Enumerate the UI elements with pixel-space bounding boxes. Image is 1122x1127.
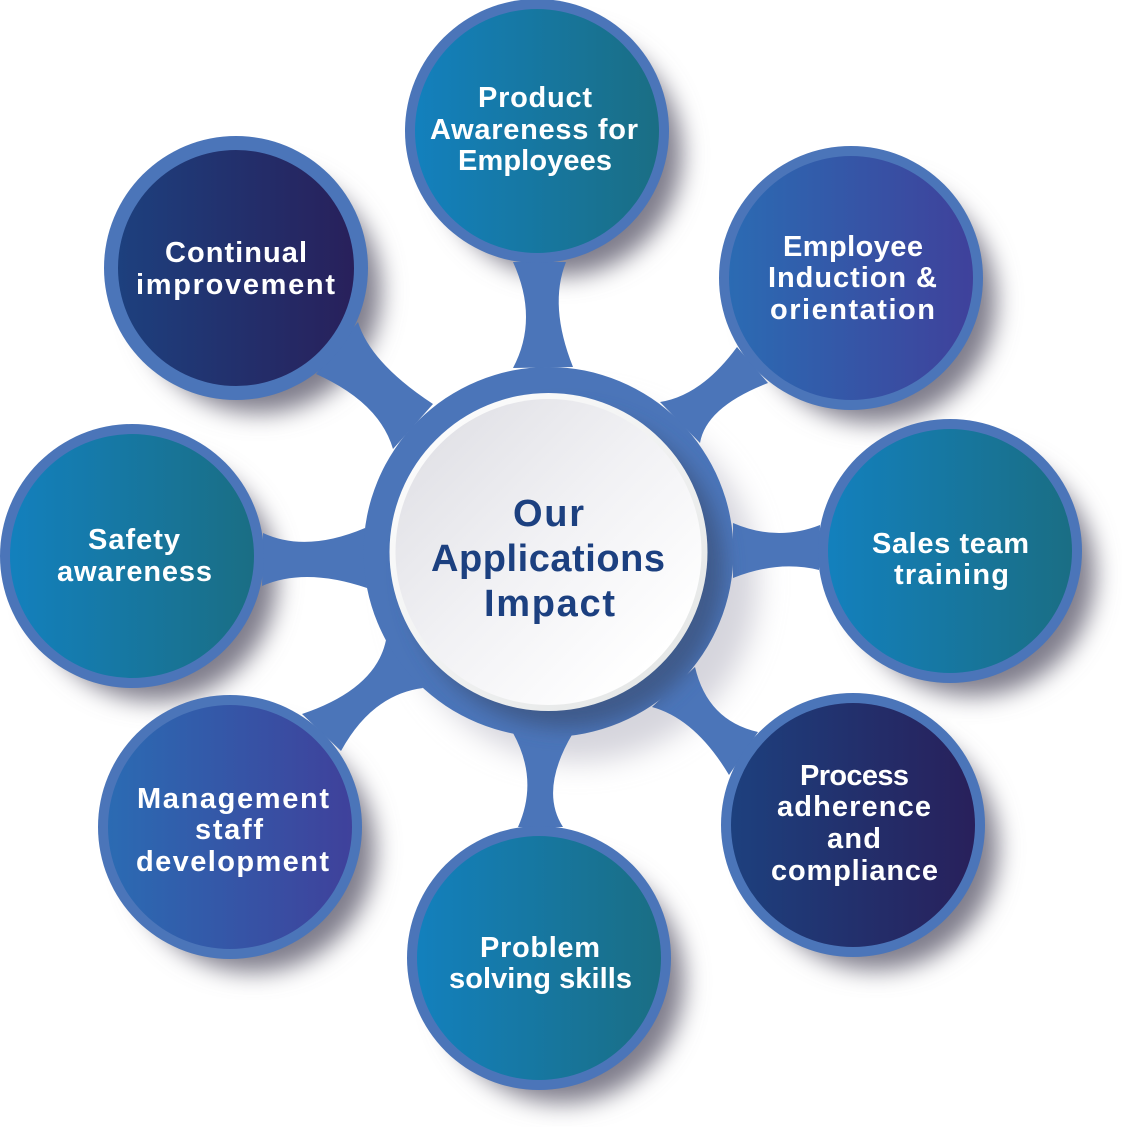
topic: Product Awareness for Employees: Employees <box>458 145 612 177</box>
topic: Safety awareness: Safety <box>88 524 180 556</box>
topic: Sales team training <box>818 419 1082 683</box>
topic: Product Awareness for Employees: Awareness for <box>430 114 638 146</box>
hub title <box>431 493 665 625</box>
topic: Management staff development: development <box>136 846 329 878</box>
topic: Sales team training: Sales team <box>872 528 1029 560</box>
topic: Safety awareness <box>0 424 264 688</box>
topic: Sales team training: training <box>894 559 1009 591</box>
connectors between hub and topics <box>262 262 820 827</box>
topic: Process adherence and compliance: adherence <box>777 791 931 823</box>
topic: Product Awareness for Employees <box>405 0 669 263</box>
topic: Process adherence and compliance: compliance <box>771 855 938 887</box>
topic: Employee Induction & orientation: Employee <box>783 231 923 263</box>
hub title: Our <box>513 493 584 535</box>
topic: Process adherence and compliance: Process <box>800 760 909 792</box>
topic: Problem solving skills: solving skills <box>449 963 632 995</box>
topic: Continual improvement: improvement <box>136 269 335 301</box>
hub ring <box>364 367 734 737</box>
topic: Employee Induction & orientation: Induction & <box>768 262 937 294</box>
topic: Product Awareness for Employees: Product <box>478 82 592 114</box>
hub title: Impact <box>484 583 615 625</box>
topic: Management staff development: staff <box>195 814 263 846</box>
topic: Safety awareness: awareness <box>57 556 212 588</box>
hub shadow on ring <box>408 412 724 728</box>
topic: Problem solving skills: Problem <box>480 932 600 964</box>
topic: Employee Induction & orientation <box>719 146 983 410</box>
topic: Management staff development <box>98 695 362 959</box>
topic: Process adherence and compliance <box>721 693 985 957</box>
topic: Employee Induction & orientation: orientation <box>770 294 935 326</box>
topic: Problem solving skills <box>407 826 671 1090</box>
hub soft shadow on background <box>398 402 758 762</box>
topic: Management staff development: Management <box>137 783 329 815</box>
topic: Continual improvement: Continual <box>165 237 307 269</box>
hub title: Applications <box>431 538 665 580</box>
topic: Process adherence and compliance: and <box>827 823 881 855</box>
hub disc <box>390 393 708 711</box>
topic: Continual improvement <box>104 136 368 400</box>
